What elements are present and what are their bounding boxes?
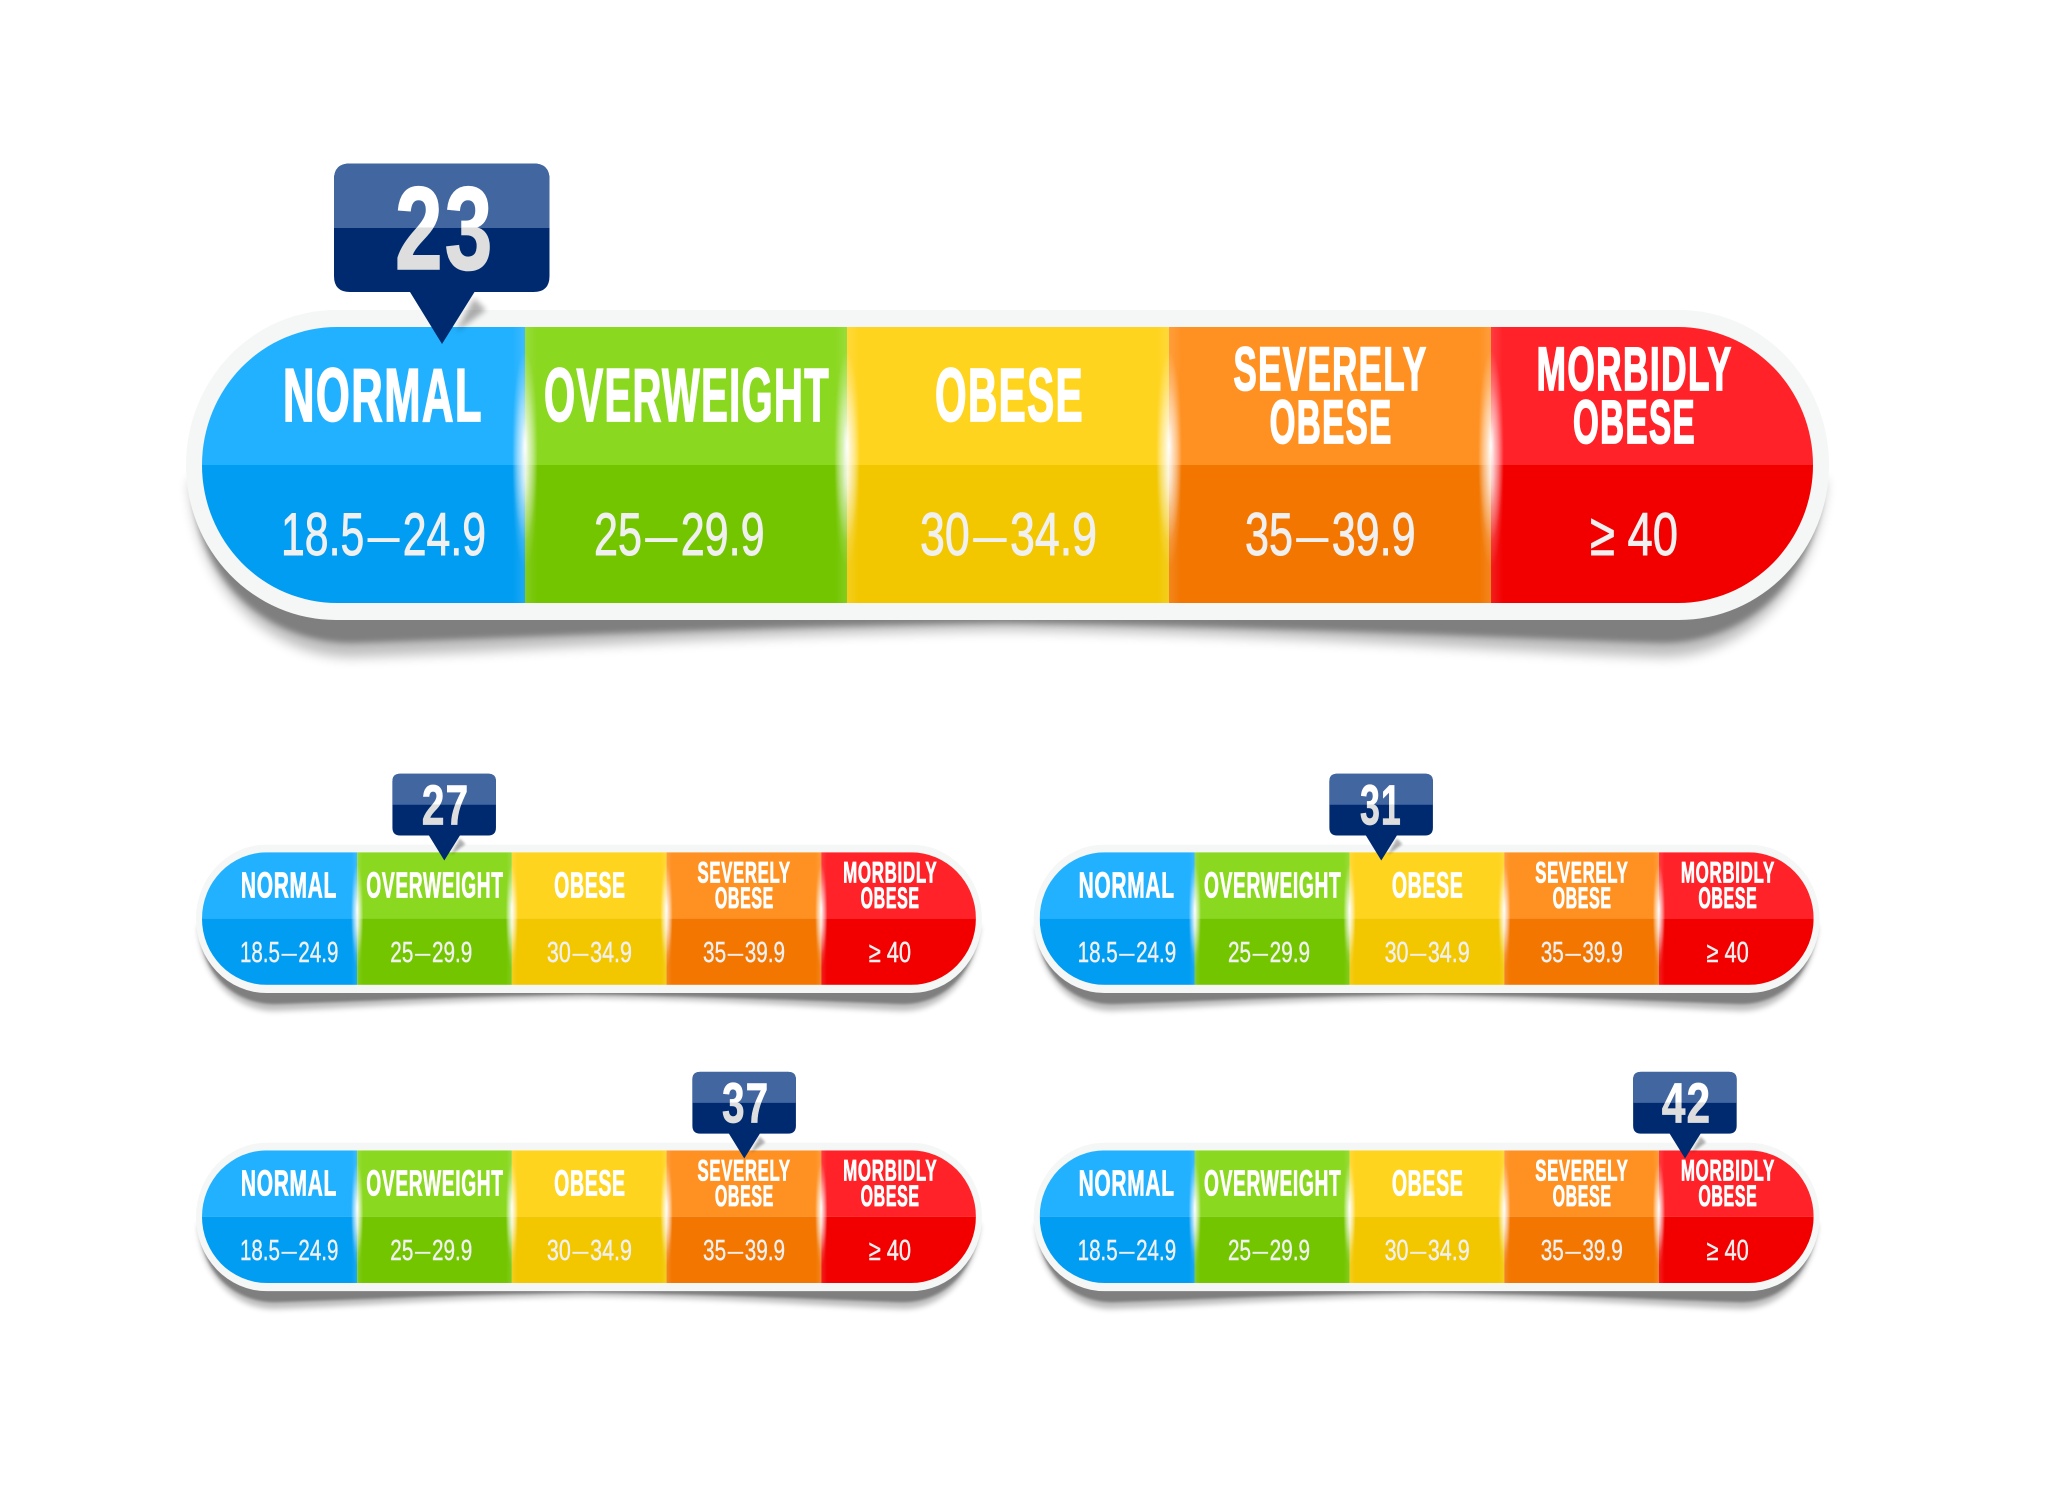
BMI ranges: ≥ 40 bbox=[1590, 501, 1678, 568]
BMI ranges bbox=[240, 937, 911, 969]
bar base bbox=[1034, 845, 1820, 1011]
category labels: MORBIDLY bbox=[843, 1155, 937, 1188]
BMI ranges: 29.9 bbox=[432, 1235, 472, 1267]
category labels: OBESE bbox=[1698, 1180, 1757, 1213]
BMI ranges: 18.5 bbox=[281, 501, 398, 568]
BMI ranges: 24.9 bbox=[1136, 937, 1176, 969]
BMI ranges: ≥ 40 bbox=[1706, 1235, 1749, 1267]
category labels: SEVERELY bbox=[1535, 1155, 1628, 1188]
category labels: OVERWEIGHT bbox=[366, 864, 504, 905]
BMI ranges: — bbox=[368, 512, 399, 561]
category labels: MORBIDLY bbox=[1537, 335, 1733, 403]
BMI ranges: 39.9 bbox=[1332, 501, 1416, 568]
category labels: NORMAL bbox=[241, 1163, 337, 1204]
segment colours bbox=[1040, 852, 1814, 985]
category labels: OBESE bbox=[1698, 882, 1757, 915]
BMI ranges: 18.5 bbox=[240, 1235, 296, 1267]
BMI ranges: 24.9 bbox=[298, 937, 338, 969]
segment colours bbox=[1040, 1150, 1814, 1283]
category labels: OBESE bbox=[861, 882, 920, 915]
category labels: OBESE bbox=[1573, 388, 1696, 456]
marker: 31: 31 bbox=[1360, 774, 1402, 837]
panel: scale with value 37 bbox=[196, 1072, 982, 1309]
BMI ranges: 30 bbox=[1385, 1235, 1417, 1267]
category labels: SEVERELY bbox=[698, 1155, 791, 1188]
panel: main BMI scale bar bbox=[186, 163, 1829, 657]
category labels: NORMAL bbox=[283, 353, 483, 437]
BMI ranges: 25 bbox=[390, 1235, 422, 1267]
BMI ranges: — bbox=[1253, 1240, 1269, 1263]
marker: 42: 42 bbox=[1662, 1073, 1711, 1136]
BMI ranges: 24.9 bbox=[403, 501, 486, 568]
segment colours bbox=[202, 327, 1813, 603]
BMI ranges: 25 bbox=[594, 501, 661, 568]
category labels: NORMAL bbox=[241, 864, 337, 905]
BMI ranges: — bbox=[1119, 942, 1135, 965]
BMI ranges: 25 bbox=[390, 937, 422, 969]
BMI ranges: — bbox=[728, 942, 744, 965]
BMI ranges: 39.9 bbox=[1582, 937, 1623, 969]
BMI ranges bbox=[281, 501, 1678, 568]
BMI ranges: — bbox=[1119, 1240, 1135, 1263]
category labels bbox=[241, 857, 937, 915]
BMI ranges: 18.5 bbox=[1078, 937, 1134, 969]
marker: 27: 27 bbox=[422, 774, 469, 837]
BMI ranges: 34.9 bbox=[1010, 501, 1097, 568]
category labels: OBESE bbox=[1553, 882, 1612, 915]
marker: 31 bbox=[1329, 774, 1433, 860]
BMI ranges: 34.9 bbox=[590, 937, 632, 969]
BMI ranges: — bbox=[973, 512, 1006, 561]
marker: 37 bbox=[692, 1072, 796, 1159]
BMI ranges: 35 bbox=[703, 937, 735, 969]
segment colours bbox=[202, 852, 976, 985]
category labels bbox=[1079, 1155, 1775, 1213]
BMI ranges: — bbox=[646, 512, 677, 561]
category labels bbox=[283, 335, 1733, 456]
category labels: SEVERELY bbox=[1535, 857, 1628, 890]
bar base: white outline and shadow bbox=[186, 310, 1829, 657]
category labels: OBESE bbox=[1553, 1180, 1612, 1213]
category labels bbox=[241, 1155, 937, 1213]
BMI ranges bbox=[1078, 937, 1749, 969]
BMI ranges: 35 bbox=[1245, 501, 1312, 568]
marker: 23 bbox=[334, 163, 550, 344]
BMI ranges: — bbox=[415, 1240, 431, 1263]
panel: scale with value 42 bbox=[1034, 1072, 1820, 1309]
BMI ranges: 18.5 bbox=[1078, 1235, 1134, 1267]
segment colours bbox=[202, 1150, 976, 1283]
BMI ranges: — bbox=[1410, 942, 1427, 965]
BMI ranges: ≥ 40 bbox=[1706, 937, 1749, 969]
category labels: MORBIDLY bbox=[843, 857, 937, 890]
BMI ranges: 24.9 bbox=[298, 1235, 338, 1267]
bar base bbox=[196, 845, 982, 1011]
BMI ranges: — bbox=[1410, 1240, 1427, 1263]
category labels: OVERWEIGHT bbox=[1204, 864, 1341, 905]
category labels: SEVERELY bbox=[698, 857, 791, 890]
BMI ranges: — bbox=[573, 1240, 589, 1263]
BMI ranges: 30 bbox=[1385, 937, 1417, 969]
marker: 23: 23 bbox=[395, 163, 494, 295]
bar base bbox=[196, 1143, 982, 1309]
category labels: MORBIDLY bbox=[1681, 857, 1775, 890]
category labels bbox=[1079, 857, 1775, 915]
BMI ranges: 29.9 bbox=[1270, 1235, 1310, 1267]
category labels: NORMAL bbox=[1079, 864, 1175, 905]
BMI ranges: 34.9 bbox=[1428, 937, 1470, 969]
category labels: OBESE bbox=[554, 1163, 626, 1204]
panel: scale with value 27 bbox=[196, 774, 982, 1011]
BMI ranges: ≥ 40 bbox=[869, 937, 911, 969]
BMI ranges: — bbox=[282, 1240, 297, 1263]
BMI ranges: 35 bbox=[1541, 937, 1573, 969]
category labels: NORMAL bbox=[1079, 1163, 1175, 1204]
bar base bbox=[1034, 1143, 1820, 1309]
category labels: OBESE bbox=[861, 1180, 920, 1213]
BMI ranges: 39.9 bbox=[745, 937, 785, 969]
category labels: OVERWEIGHT bbox=[366, 1163, 504, 1204]
marker: 42 bbox=[1633, 1072, 1737, 1159]
BMI ranges: — bbox=[415, 942, 431, 965]
BMI ranges: — bbox=[1253, 942, 1269, 965]
BMI ranges: 35 bbox=[1541, 1235, 1573, 1267]
BMI ranges: 39.9 bbox=[1582, 1235, 1623, 1267]
BMI ranges: 24.9 bbox=[1136, 1235, 1176, 1267]
category labels: OBESE bbox=[935, 353, 1084, 437]
category labels: OBESE bbox=[715, 882, 774, 915]
BMI ranges: ≥ 40 bbox=[869, 1235, 911, 1267]
category labels: MORBIDLY bbox=[1681, 1155, 1775, 1188]
marker: 37: 37 bbox=[722, 1073, 769, 1136]
BMI ranges: 39.9 bbox=[745, 1235, 785, 1267]
BMI ranges: 25 bbox=[1228, 1235, 1260, 1267]
category labels: OVERWEIGHT bbox=[544, 353, 830, 437]
category labels: OBESE bbox=[1392, 1163, 1463, 1204]
BMI ranges: 30 bbox=[547, 1235, 579, 1267]
BMI ranges: 29.9 bbox=[681, 501, 765, 568]
BMI ranges: — bbox=[1566, 1240, 1581, 1263]
BMI ranges: 29.9 bbox=[432, 937, 472, 969]
BMI ranges: 30 bbox=[547, 937, 579, 969]
BMI ranges: 18.5 bbox=[240, 937, 296, 969]
category labels: OVERWEIGHT bbox=[1204, 1163, 1341, 1204]
category labels: OBESE bbox=[715, 1180, 774, 1213]
panel: scale with value 31 bbox=[1034, 774, 1820, 1011]
BMI ranges: 25 bbox=[1228, 937, 1260, 969]
BMI ranges: — bbox=[728, 1240, 744, 1263]
category labels: OBESE bbox=[1270, 388, 1393, 456]
category labels: SEVERELY bbox=[1234, 335, 1428, 403]
BMI ranges: 34.9 bbox=[1428, 1235, 1470, 1267]
marker: 27 bbox=[392, 774, 496, 860]
BMI ranges bbox=[240, 1235, 911, 1267]
BMI ranges: 30 bbox=[920, 501, 987, 568]
BMI ranges: 29.9 bbox=[1270, 937, 1310, 969]
category labels: OBESE bbox=[554, 864, 626, 905]
BMI ranges: — bbox=[1297, 512, 1328, 561]
category labels: OBESE bbox=[1392, 864, 1463, 905]
BMI ranges: — bbox=[282, 942, 297, 965]
BMI ranges: 34.9 bbox=[590, 1235, 632, 1267]
BMI ranges: — bbox=[1566, 942, 1581, 965]
BMI ranges: — bbox=[573, 942, 589, 965]
BMI ranges bbox=[1078, 1235, 1749, 1267]
BMI ranges: 35 bbox=[703, 1235, 735, 1267]
